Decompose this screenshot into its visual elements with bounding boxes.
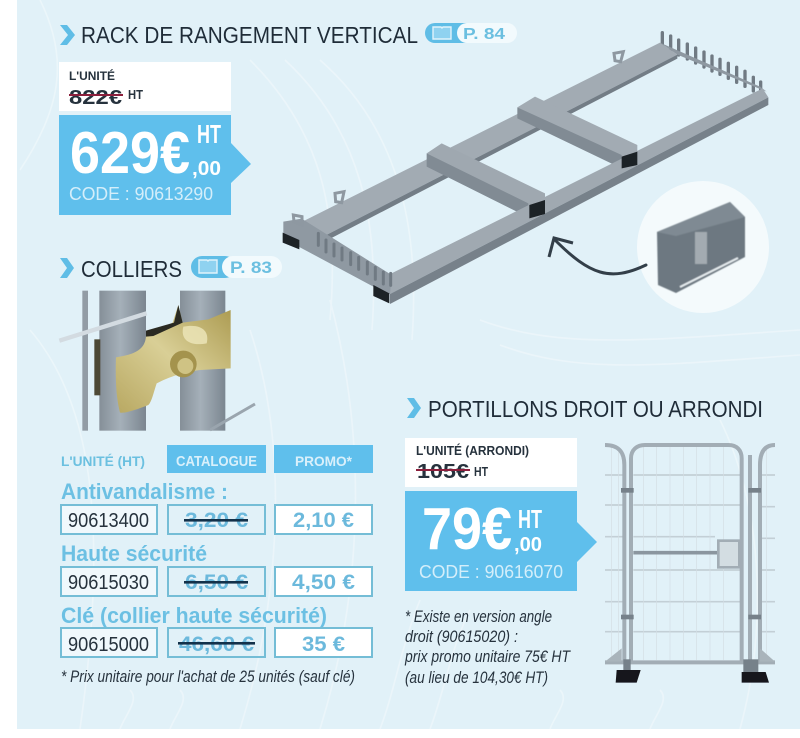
panel: promo price rack: HT xyxy=(197,119,221,149)
table row: antivandalisme: 90613400 xyxy=(68,510,149,532)
table row: cle xyxy=(61,603,372,657)
panel: old price gate xyxy=(405,438,577,487)
page reference badge P. 83 xyxy=(191,256,282,278)
note: gate versions: (au lieu de 104,30€ HT) xyxy=(405,668,548,687)
table header: PROMO* xyxy=(295,453,353,469)
table row: antivandalisme xyxy=(61,479,372,534)
front beam xyxy=(283,219,392,294)
heading: colliers: COLLIERS xyxy=(81,256,182,282)
illustration: vertical storage rack xyxy=(283,33,768,304)
cross bars xyxy=(427,143,545,217)
table row: haute securite: 4,50 € xyxy=(292,571,355,594)
panel: promo price rack: ,00 xyxy=(192,158,221,180)
panel: promo price gate: 79€ xyxy=(422,496,512,562)
table header xyxy=(61,445,373,473)
panel: promo price gate: HT xyxy=(518,504,542,534)
panel: promo price rack: 629€ xyxy=(70,120,190,186)
panel: promo price gate: CODE : 90616070 xyxy=(419,561,563,582)
photo: gold fence collar xyxy=(59,291,255,431)
table row: cle: 46,60 € xyxy=(179,633,254,656)
panel: promo price rack xyxy=(59,115,251,215)
arrow: to rack xyxy=(549,238,646,274)
rear end beam xyxy=(660,43,767,92)
lugs xyxy=(293,52,623,225)
page reference badge P. 84: P. 84 xyxy=(463,26,505,43)
footnote: colliers: * Prix unitaire pour l'achat de 25 unités (sauf clé) xyxy=(61,667,355,686)
table header: CATALOGUE xyxy=(176,454,257,470)
table header: L'UNITÉ (HT) xyxy=(61,453,145,469)
panel: old price rack: HT xyxy=(128,88,143,102)
note: gate versions: droit (90615020) : xyxy=(405,627,518,646)
table row: haute securite xyxy=(61,541,372,596)
table row: antivandalisme: Antivandalisme : xyxy=(61,479,228,504)
table row: haute securite: 6,50 € xyxy=(185,571,248,594)
heading: portillons: PORTILLONS DROIT OU ARRONDI xyxy=(428,396,763,422)
comb front xyxy=(318,233,391,285)
page reference badge P. 84 xyxy=(425,23,517,43)
note: gate versions xyxy=(404,607,571,687)
panel: promo price rack: CODE : 90613290 xyxy=(69,183,213,204)
photo: fence gate xyxy=(605,445,775,683)
heading: rack de rangement vertical: RACK DE RANGEMENT VERTICAL xyxy=(81,22,418,48)
table row: cle: 35 € xyxy=(302,633,345,656)
panel: promo price gate: ,00 xyxy=(514,534,542,556)
table row: cle: Clé (collier haute sécurité) xyxy=(61,603,327,628)
tube ends xyxy=(283,152,637,303)
comb rear xyxy=(662,33,761,95)
page reference badge P. 83: P. 83 xyxy=(230,259,272,277)
table row: haute securite: Haute sécurité xyxy=(61,541,207,566)
panel: old price gate: 105€ xyxy=(417,461,469,483)
inset circle: stored racks xyxy=(637,181,769,313)
panel: old price gate: HT xyxy=(474,465,488,479)
panel: old price gate: L'UNITÉ (ARRONDI) xyxy=(416,443,529,458)
note: gate versions: prix promo unitaire 75€ HT xyxy=(404,647,571,666)
note: gate versions: * Existe en version angle xyxy=(405,607,552,626)
panel: old price rack: 822€ xyxy=(69,87,122,109)
table row: antivandalisme: 2,10 € xyxy=(293,509,354,532)
panel: old price rack xyxy=(59,62,231,111)
panel: old price rack: L'UNITÉ xyxy=(69,70,115,83)
table row: antivandalisme: 3,20 € xyxy=(185,509,248,532)
table row: haute securite: 90615030 xyxy=(68,572,149,594)
table row: cle: 90615000 xyxy=(68,634,149,656)
bottom rail xyxy=(385,88,768,294)
top rail xyxy=(302,43,677,237)
panel: promo price gate xyxy=(405,491,597,591)
